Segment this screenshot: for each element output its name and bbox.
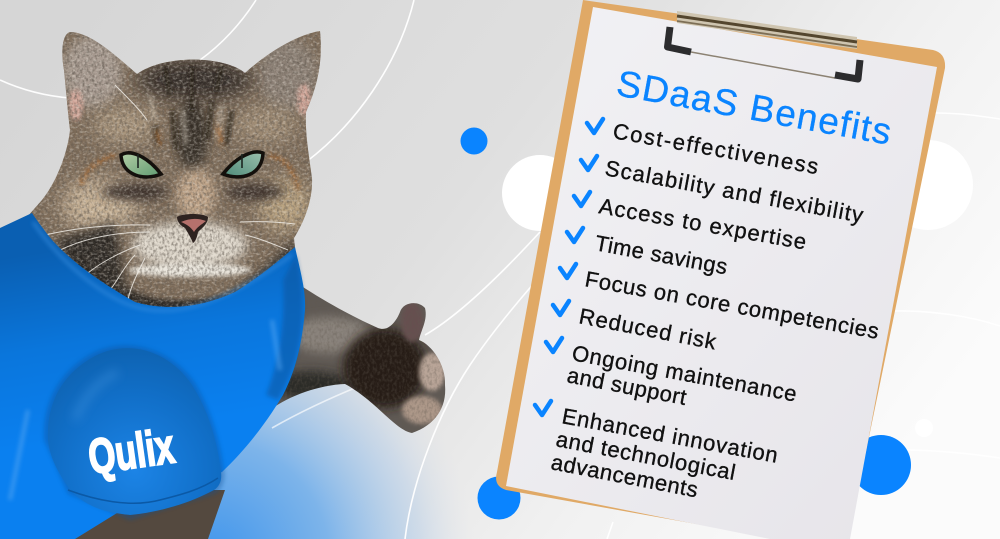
decorative blue circles bbox=[460, 128, 911, 520]
clipboard paper bbox=[506, 7, 937, 539]
cat head bbox=[29, 31, 321, 307]
heading: SDaaS Benefits: SDaaS Benefits bbox=[614, 63, 894, 153]
cat body below vest bbox=[70, 490, 225, 539]
item: focus on core competencies: Focus on core competencies bbox=[583, 266, 881, 344]
vest logo: Qulix: Qulix bbox=[85, 419, 178, 485]
item: reduced risk: Reduced risk bbox=[577, 303, 719, 355]
item: enhanced innovation and technological advancements: and technological bbox=[554, 426, 738, 485]
item: enhanced innovation and technological advancements: advancements bbox=[549, 449, 700, 502]
benefits list bbox=[535, 118, 881, 502]
vest pocket bbox=[44, 345, 224, 520]
clipboard board bbox=[496, 0, 945, 539]
item: enhanced innovation and technological advancements bbox=[549, 403, 780, 502]
item: time savings: Time savings bbox=[593, 230, 729, 279]
item: cost-effectiveness: Cost-effectiveness bbox=[611, 118, 820, 179]
item: scalability and flexibility: Scalability and flexibility bbox=[603, 155, 865, 228]
cat left eye bbox=[121, 153, 161, 177]
item: ongoing maintenance and support: Ongoing maintenance bbox=[570, 340, 799, 406]
decorative white circles bbox=[502, 140, 973, 437]
cat arm and thumbs-up paw bbox=[276, 288, 446, 433]
cat nose bbox=[177, 214, 208, 243]
clipboard bbox=[496, 0, 945, 539]
cat whiskers bbox=[45, 85, 295, 300]
metal clip bbox=[668, 11, 860, 79]
blue vest bbox=[0, 213, 305, 539]
cat illustration bbox=[0, 20, 460, 539]
item: ongoing maintenance and support: and support bbox=[565, 362, 689, 410]
item: access to expertise: Access to expertise bbox=[597, 193, 808, 254]
item: enhanced innovation and technological advancements: Enhanced innovation bbox=[560, 403, 780, 468]
cat right eye bbox=[223, 152, 263, 177]
check icons bbox=[535, 119, 603, 415]
